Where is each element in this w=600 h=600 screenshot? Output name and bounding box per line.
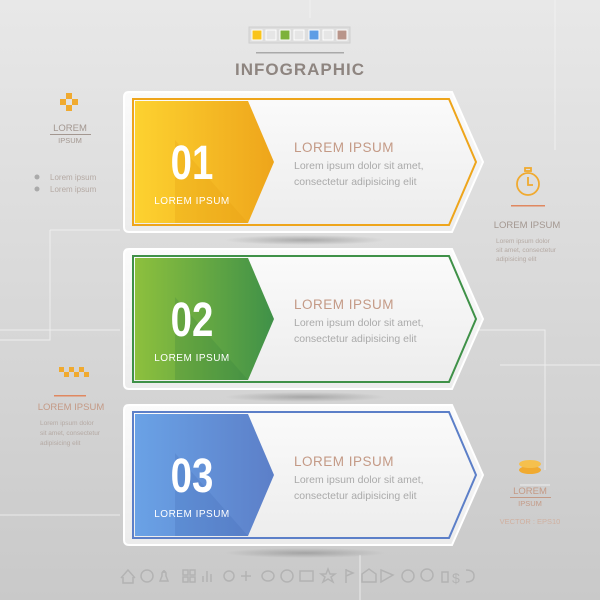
card 03: consectetur adipisicing elit [294,490,417,502]
shadows [225,235,385,558]
side block right: stopwatch: Lorem ipsum dolor [496,238,551,245]
card 02 [124,249,483,389]
side block left middle: LOREM IPSUM [38,402,104,413]
card 02: Lorem ipsum dolor sit amet, [294,317,424,329]
side block left middle: Lorem ipsum dolor [40,420,95,427]
icon row: $ [452,570,460,586]
card 01: Lorem ipsum dolor sit amet, [294,160,424,172]
side block right: stopwatch [494,168,560,263]
side block right: stopwatch: adipisicing elit [496,256,537,263]
card 01: LOREM IPSUM [154,196,230,207]
side block top-left [34,93,97,194]
side block right: stopwatch: sit amet, consectetur [496,247,557,254]
side block top-left: Lorem ipsum [50,185,97,194]
card 01: consectetur adipisicing elit [294,176,417,188]
text block 01: LOREM IPSUM [294,140,394,155]
text block 02: LOREM IPSUM [294,297,394,312]
card 02: consectetur adipisicing elit [294,333,417,345]
number 01: 01 [171,137,213,190]
side block right: coins: LOREM [513,486,547,497]
card 03: Lorem ipsum dolor sit amet, [294,474,424,486]
side block top-left: Lorem ipsum [50,173,97,182]
side block left middle: adipisicing elit [40,440,81,447]
header: color swatches [249,27,350,54]
number 03: 03 [171,450,213,503]
side block left middle: sit amet, consectetur [40,430,101,437]
side block right: coins: IPSUM [518,499,542,508]
side block right: coins: VECTOR : EPS10 [500,517,560,526]
text block 03: LOREM IPSUM [294,454,394,469]
title: INFOGRAPHIC [235,60,365,79]
side block right: stopwatch: LOREM IPSUM [494,220,560,231]
side block top-left: IPSUM [58,136,82,145]
number 02: 02 [171,294,213,347]
icon row [121,569,474,586]
side block top-left: LOREM [53,123,87,134]
card 02: LOREM IPSUM [154,353,230,364]
card 03 [124,405,483,545]
side block right: coins [500,460,560,526]
card 01 [124,92,483,232]
side block left middle [38,367,104,447]
card 03: LOREM IPSUM [154,509,230,520]
